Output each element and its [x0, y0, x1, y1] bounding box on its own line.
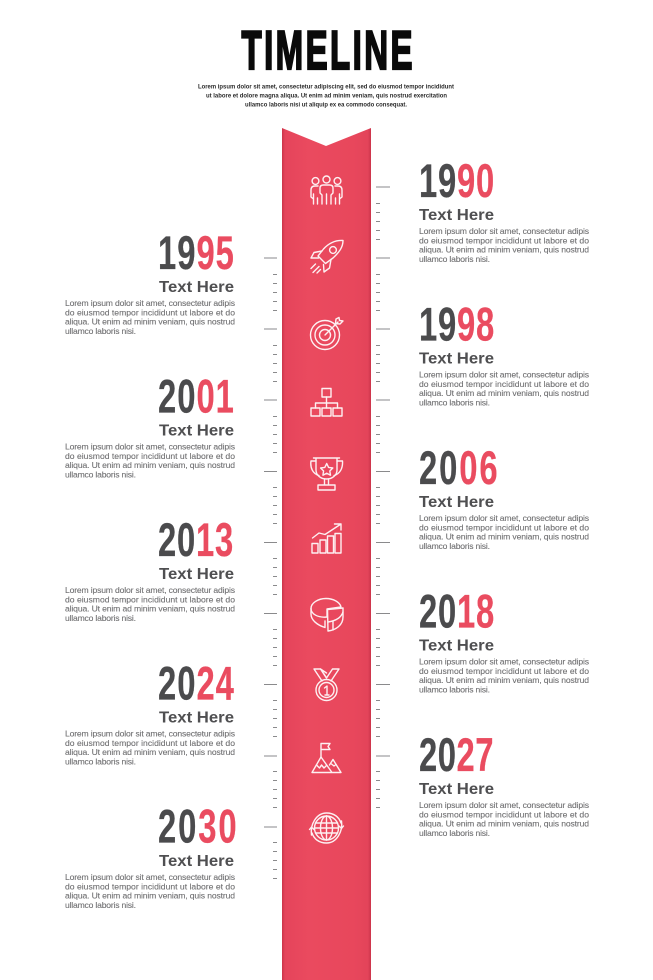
heading: Text Here — [159, 710, 234, 726]
timeline item: 2006 — [419, 441, 589, 551]
body text: aliqua. Ut enim ad minim veniam, quis nostrud — [65, 317, 235, 327]
body text: Lorem ipsum dolor sit amet, consectetur adipis — [65, 585, 235, 595]
body text: Lorem ipsum dolor sit amet, consectetur adipis — [65, 872, 235, 882]
year: 2024 — [158, 656, 234, 710]
body text: do eiusmod tempor incididunt ut labore et do — [419, 666, 589, 676]
timeline item: 1995 — [65, 226, 235, 336]
body text: aliqua. Ut enim ad minim veniam, quis nostrud — [419, 388, 589, 398]
body text: do eiusmod tempor incididunt ut labore et do — [65, 594, 235, 604]
body text — [65, 298, 235, 336]
timeline item: 1990 — [419, 154, 589, 264]
timeline item: 2018 — [419, 584, 589, 694]
body text: do eiusmod tempor incididunt ut labore et do — [65, 307, 235, 317]
year: 1990 — [419, 154, 494, 207]
body text: ullamco laboris nisi. — [65, 900, 136, 910]
body text: do eiusmod tempor incididunt ut labore et do — [65, 451, 235, 461]
heading: Text Here — [159, 279, 234, 296]
body text: ullamco laboris nisi. — [419, 828, 490, 838]
icon: team — [311, 176, 342, 204]
year: 2030 — [158, 799, 237, 853]
body text: do eiusmod tempor incididunt ut labore et do — [419, 235, 589, 245]
body text: aliqua. Ut enim ad minim veniam, quis nostrud — [65, 891, 235, 901]
timeline item: 2027 — [419, 728, 589, 838]
body text — [65, 585, 235, 623]
body text: Lorem ipsum dolor sit amet, consectetur adipis — [419, 800, 589, 810]
body text — [419, 226, 589, 264]
body text: ullamco laboris nisi. — [65, 326, 136, 336]
heading: Text Here — [159, 853, 234, 870]
left tick scale — [264, 258, 277, 879]
body text: Lorem ipsum dolor sit amet, consectetur adipis — [419, 226, 589, 236]
icon: medal — [314, 669, 339, 700]
body text: ullamco laboris nisi. — [419, 684, 490, 694]
icon: organisation chart — [311, 388, 342, 416]
body text: do eiusmod tempor incididunt ut labore et do — [419, 522, 589, 532]
body text — [419, 800, 589, 838]
timeline item: 2024 — [65, 656, 235, 766]
year: 1995 — [158, 226, 234, 279]
body text — [65, 872, 235, 910]
year: 2013 — [158, 513, 233, 566]
intro text block: Lorem ipsum dolor sit amet, consectetur adipiscing elit, sed do eiusmod tempor incididunt — [198, 84, 455, 90]
timeline item: 2030 — [65, 799, 237, 910]
heading: Text Here — [419, 207, 494, 224]
icon: growth chart — [312, 524, 341, 553]
body text: aliqua. Ut enim ad minim veniam, quis nostrud — [65, 460, 235, 470]
timeline item: 1998 — [419, 297, 589, 407]
body text: Lorem ipsum dolor sit amet, consectetur adipis — [65, 728, 235, 738]
body text: Lorem ipsum dolor sit amet, consectetur adipis — [419, 370, 589, 380]
intro text block: ullamco laboris nisi ut aliquip ex ea commodo consequat. — [245, 102, 407, 108]
icon: pie chart — [311, 598, 343, 631]
body text: ullamco laboris nisi. — [419, 541, 490, 551]
intro text block: ut labore et dolore magna aliqua. Ut enim ad minim veniam, quis nostrud exercitation — [206, 92, 447, 100]
body text: do eiusmod tempor incididunt ut labore et do — [419, 379, 589, 389]
body text: aliqua. Ut enim ad minim veniam, quis nostrud — [65, 747, 235, 757]
year: 1998 — [419, 297, 494, 351]
body text — [419, 656, 589, 694]
body text: Lorem ipsum dolor sit amet, consectetur adipis — [419, 513, 589, 523]
year: 2006 — [419, 441, 498, 494]
intro text block — [198, 84, 455, 108]
body text: Lorem ipsum dolor sit amet, consectetur adipis — [419, 656, 589, 666]
body text: do eiusmod tempor incididunt ut labore et do — [65, 738, 235, 748]
heading: Text Here — [419, 350, 494, 368]
central red ribbon — [282, 128, 371, 980]
body text: Lorem ipsum dolor sit amet, consectetur adipis — [65, 442, 235, 452]
body text: aliqua. Ut enim ad minim veniam, quis nostrud — [65, 604, 235, 614]
body text: aliqua. Ut enim ad minim veniam, quis nostrud — [419, 819, 589, 829]
title: TIMELINE — [242, 19, 413, 81]
icon: globe — [310, 813, 344, 843]
icon: trophy — [311, 458, 343, 490]
body text: do eiusmod tempor incididunt ut labore et do — [419, 809, 589, 819]
body text: do eiusmod tempor incididunt ut labore et do — [65, 881, 235, 891]
timeline item: 2013 — [65, 513, 235, 623]
body text: aliqua. Ut enim ad minim veniam, quis nostrud — [419, 245, 589, 255]
icon: mountain flag — [312, 744, 341, 772]
icon: target — [310, 318, 343, 350]
body text: aliqua. Ut enim ad minim veniam, quis nostrud — [419, 532, 589, 542]
body text: aliqua. Ut enim ad minim veniam, quis nostrud — [419, 675, 589, 685]
timeline item: 2001 — [65, 369, 235, 479]
body text: ullamco laboris nisi. — [65, 469, 136, 479]
heading: Text Here — [419, 638, 494, 654]
body text: ullamco laboris nisi. — [419, 254, 490, 264]
body text — [419, 370, 589, 407]
year: 2001 — [158, 369, 234, 423]
year: 2027 — [419, 728, 494, 781]
heading: Text Here — [419, 781, 494, 798]
body text — [419, 513, 589, 551]
body text — [65, 442, 235, 479]
body text — [65, 728, 235, 766]
heading: Text Here — [159, 422, 234, 440]
heading: Text Here — [419, 494, 494, 511]
body text: Lorem ipsum dolor sit amet, consectetur adipis — [65, 298, 235, 308]
body text: ullamco laboris nisi. — [65, 613, 136, 623]
body text: ullamco laboris nisi. — [419, 397, 490, 407]
year: 2018 — [419, 584, 494, 638]
icon: rocket — [311, 240, 343, 273]
body text: ullamco laboris nisi. — [65, 756, 136, 766]
right tick scale — [376, 187, 390, 808]
heading: Text Here — [159, 566, 234, 583]
